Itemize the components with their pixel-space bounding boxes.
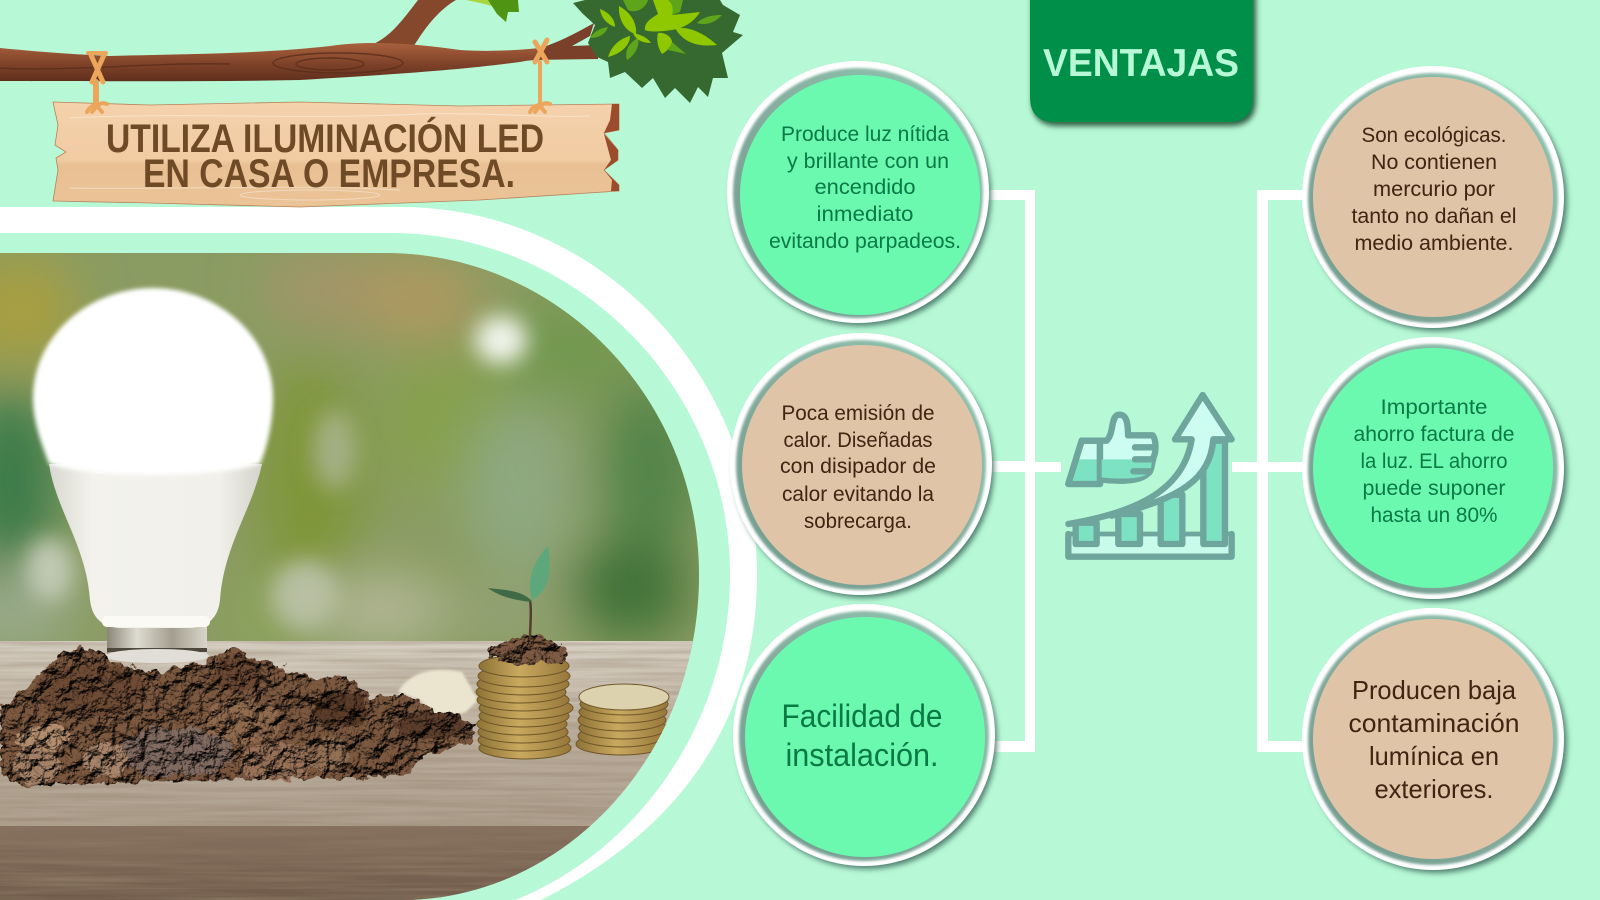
tree branch with leaves xyxy=(0,0,743,103)
wood grain xyxy=(70,114,590,200)
title: UTILIZA ILUMINACIÓN LED xyxy=(106,115,544,161)
main limb xyxy=(0,43,540,81)
circle 1: luz nítida: y brillante con un xyxy=(787,150,949,173)
right rope xyxy=(530,40,550,112)
white shell beside coins xyxy=(398,670,478,720)
circle 2: poca emisión de calor xyxy=(730,333,994,598)
blurred garden backdrop xyxy=(0,250,710,650)
circle 3: facilidad de instalación xyxy=(733,604,997,869)
circle 5: ahorro factura: ahorro factura de xyxy=(1354,423,1514,446)
plank xyxy=(53,102,619,207)
icon: thumbs up and rising chart xyxy=(1068,395,1232,557)
chart bars xyxy=(1076,441,1225,544)
heading tab: VENTAJAS xyxy=(1030,0,1256,126)
circle 5: ahorro factura: hasta un 80% xyxy=(1370,504,1498,527)
circle 3: facilidad de instalación: Facilidad de xyxy=(782,698,942,734)
bright leaves xyxy=(590,0,722,60)
thumb hand xyxy=(1100,415,1155,481)
twig to leaves xyxy=(530,23,598,60)
circle 5: ahorro factura xyxy=(1302,337,1567,602)
heading tab: VENTAJAS: VENTAJAS xyxy=(1043,42,1239,85)
chart base xyxy=(1068,534,1232,557)
circle 5: ahorro factura: la luz. EL ahorro xyxy=(1360,450,1508,473)
circle 4: ecológicas: No contienen xyxy=(1371,151,1497,174)
circle 6: baja contaminación: exteriores. xyxy=(1374,774,1494,804)
circle 2: poca emisión de calor: calor. Diseñadas xyxy=(784,429,932,452)
sprout xyxy=(488,546,550,640)
circle 2: poca emisión de calor: calor evitando la xyxy=(782,483,934,506)
small top leaves xyxy=(466,0,519,22)
circle 6: baja contaminación: contaminación xyxy=(1348,708,1520,738)
circle 6: baja contaminación: lumínica en xyxy=(1369,741,1499,771)
soil pile xyxy=(0,647,477,785)
circle 4: ecológicas: mercurio por xyxy=(1373,178,1495,201)
plank dark end xyxy=(604,104,619,191)
soil on coins xyxy=(486,636,569,664)
circle 4: ecológicas: medio ambiente. xyxy=(1354,232,1514,255)
circle 1: luz nítida: inmediato xyxy=(816,203,914,226)
upper branch xyxy=(350,0,456,56)
circle 3: facilidad de instalación: instalación. xyxy=(786,737,938,773)
title: EN CASA O EMPRESA. xyxy=(143,152,515,196)
thumb cuff xyxy=(1068,441,1100,484)
bark swirl xyxy=(0,53,403,73)
circle 6: baja contaminación: Producen baja xyxy=(1352,675,1517,705)
circle 1: luz nítida xyxy=(727,61,991,326)
light bulb xyxy=(33,288,273,663)
dark leaf mass xyxy=(573,0,743,103)
hanging sign xyxy=(53,40,619,207)
white arc band around photo xyxy=(0,207,757,900)
circle 2: poca emisión de calor: sobrecarga. xyxy=(804,510,912,533)
circle 1: luz nítida: encendido xyxy=(814,176,916,199)
connector lines xyxy=(980,190,1320,752)
circle 2: poca emisión de calor: Poca emisión de xyxy=(782,402,934,425)
circle 5: ahorro factura: puede suponer xyxy=(1362,477,1506,500)
circle 4: ecológicas: tanto no dañan el xyxy=(1352,205,1516,228)
rising arrow xyxy=(1068,395,1232,524)
title xyxy=(106,115,544,196)
wooden table xyxy=(0,641,710,900)
circle 4: ecológicas: Son ecológicas. xyxy=(1362,124,1506,147)
photo: LED bulb, soil and coins xyxy=(0,250,710,900)
circle 2: poca emisión de calor: con disipador de xyxy=(780,455,936,478)
circle 4: ecológicas xyxy=(1302,66,1567,331)
circle 1: luz nítida: evitando parpadeos. xyxy=(769,230,961,253)
circle 5: ahorro factura: Importante xyxy=(1380,396,1488,419)
left rope xyxy=(87,53,107,112)
circle 6: baja contaminación xyxy=(1302,608,1567,873)
circle 1: luz nítida: Produce luz nítida xyxy=(781,123,949,146)
coin stacks xyxy=(476,655,669,759)
